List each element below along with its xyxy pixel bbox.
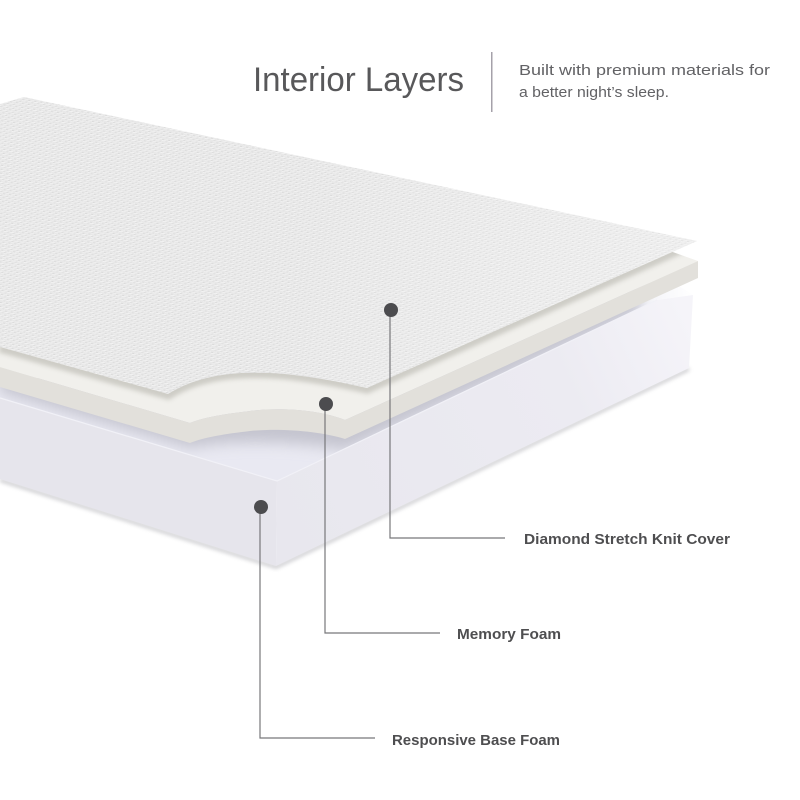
callout: memory foam (319, 397, 561, 643)
layer: responsive base foam (0, 270, 693, 567)
base highlight edge (0, 300, 657, 481)
foam front side (0, 261, 698, 443)
base left side (0, 398, 277, 566)
layer: diamond stretch knit cover (0, 97, 697, 394)
callout: memory foam: Memory Foam (457, 627, 561, 643)
cover highlight (24, 97, 697, 388)
foam top surface (0, 250, 698, 423)
subtitle: a better night’s sleep. (519, 85, 669, 101)
layer: memory foam (0, 241, 698, 443)
callout: diamond stretch knit cover (384, 303, 730, 548)
cover surface (0, 97, 697, 394)
header divider (491, 52, 492, 112)
title: Interior Layers (253, 61, 464, 99)
callout: diamond stretch knit cover: Diamond Stretch Knit Cover (524, 532, 730, 548)
foam top shadow from cover (0, 241, 697, 394)
base right side (276, 295, 693, 566)
base top surface (0, 280, 693, 481)
base top shadow from foam (0, 270, 640, 450)
base drop shadow (0, 369, 689, 567)
callout: responsive base foam: Responsive Base Foam (392, 733, 560, 749)
subtitle: Built with premium materials for (519, 63, 770, 79)
callout: responsive base foam (254, 500, 560, 749)
